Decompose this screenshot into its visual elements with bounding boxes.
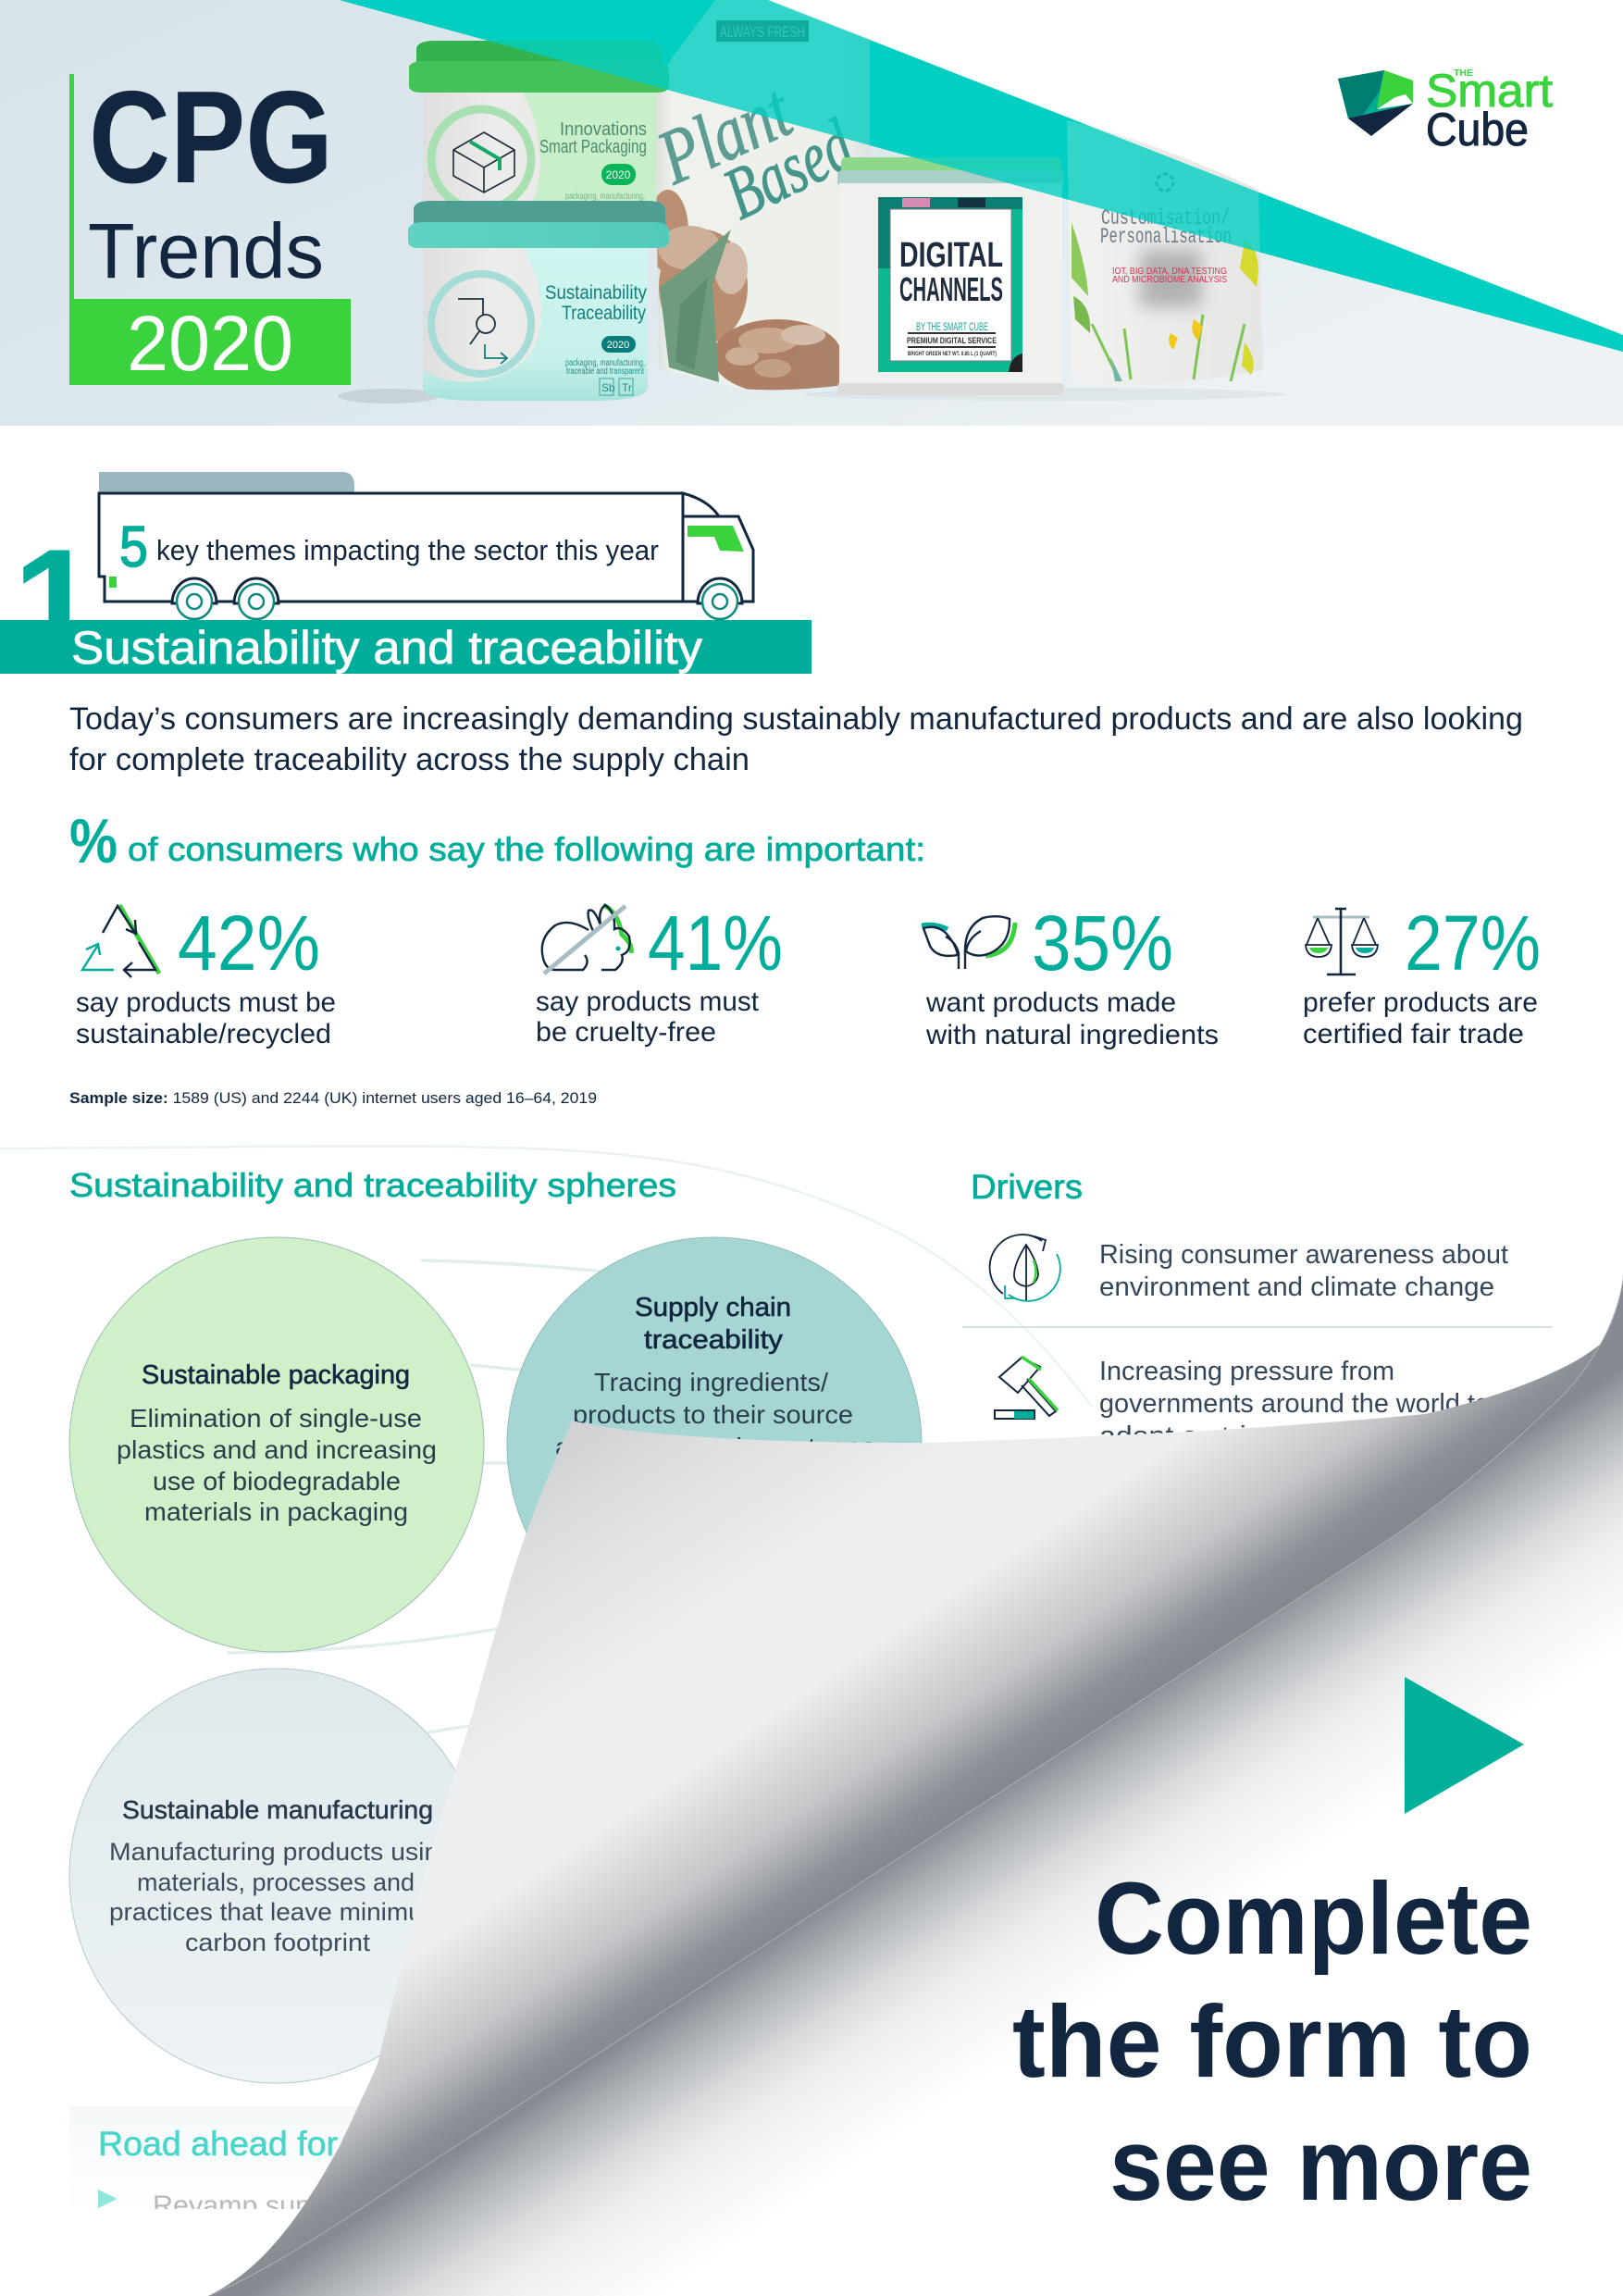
stat: 42%: say products must be [76,987,336,1018]
icon: rabbit crossed out [542,905,631,974]
sphere: supply chain traceability [507,1237,922,1652]
title block: CPG [89,64,333,211]
header background [0,0,1623,426]
product: digital channels tin: BY THE SMART CUBE [916,320,988,333]
driver: government pressure: adopt a stringent policy [1099,1421,1406,1451]
stat: 35%: 35% [1032,900,1173,987]
product: customisation pouch: AND MICROBIOME ANALYSIS [1112,275,1227,285]
stat: 35%: with natural ingredients [925,1020,1219,1050]
product: tub innovations smart packaging [409,41,669,209]
call to action text: Complete [1095,1862,1532,1976]
sphere: supply chain traceability: and across various stages [555,1433,875,1461]
product: tub sustainability traceability: Tr [622,381,632,394]
logo: The Smart Cube: Smart [1426,65,1553,117]
stat: 27%: 27% [1405,900,1541,987]
title block: Trends [88,207,324,294]
call to action text: see more [1109,2108,1532,2222]
product: tub sustainability traceability: packaging, manufacturing, [565,358,645,368]
icon: flower [1157,174,1173,191]
sphere: sustainable packaging: materials in packaging [144,1497,408,1526]
call to action text: the form to [1012,1985,1532,2099]
panel: road ahead: Revamp supply [153,2191,347,2221]
product: tub sustainability traceability: traceable and transparent [566,366,644,377]
icon: gavel [995,1357,1058,1419]
icon: traceability magnifier [458,299,507,364]
truck with heading: 5 [119,515,148,579]
logo: The Smart Cube [1338,65,1553,155]
product: tub innovations smart packaging: packaging, manufacturing, [565,192,645,202]
drivers heading: Drivers [971,1168,1083,1206]
icon: recycle triangle [82,905,159,977]
wheels [172,578,742,619]
product: plant based bag [645,0,870,395]
divider [962,1326,1553,1328]
product: tub sustainability traceability: Sustainability [545,282,647,304]
product: customisation pouch [1067,120,1263,385]
stat: 41% [536,900,783,1048]
sample size note: Sample size: 1589 (US) and 2244 (UK) internet users aged 16–64, 2019 [69,1089,597,1107]
stat: 35%: want products made [925,987,1176,1018]
call to action text [1012,1862,1532,2222]
stat: 42%: sustainable/recycled [76,1019,331,1049]
stat: 42% [76,900,336,1049]
stat: 27%: prefer products are [1303,987,1538,1018]
stats heading: % [69,806,118,876]
arrow: play triangle [1405,1677,1524,1814]
intro paragraph: for complete traceability across the supply chain [69,742,750,777]
driver: government pressure: Increasing pressure from [1099,1357,1394,1386]
product: digital channels tin: BRIGHT GREEN NET WT. 0.85 L (1 QUART) [908,352,997,357]
stat: 42%: 42% [178,900,320,987]
intro paragraph: Today’s consumers are increasingly demanding sustainably manufactured products and are also looking [69,701,1523,737]
icon: parcel box [453,132,514,192]
sphere: sustainable manufacturing [69,1669,484,2083]
product: customisation pouch: Customisation/ [1101,206,1230,230]
product: digital channels tin [837,157,1064,395]
sphere: sustainable manufacturing: materials, processes and [137,1868,415,1896]
panel: road ahead: Road ahead for [98,2125,338,2163]
sphere: supply chain traceability: traceability [644,1325,784,1355]
product: plant based bag: Plant [645,68,805,202]
big theme number 1: 1 [13,517,98,688]
sphere: sustainable packaging: plastics and and increasing [117,1435,437,1464]
icon: sprout leaves [922,916,1015,969]
truck with heading: key themes impacting the sector this year [156,534,659,566]
product: tub sustainability traceability: 2020 [607,340,629,351]
stat: 27% [1303,900,1541,1049]
product: tub innovations smart packaging: Innovations [560,119,647,140]
sphere: sustainable packaging: Sustainable packaging [142,1360,410,1390]
product: tub sustainability traceability [408,201,669,401]
truck with heading [99,472,753,619]
panel: road ahead [69,2106,358,2209]
intro paragraph [69,701,1523,777]
stat: 27%: certified fair trade [1303,1019,1524,1049]
driver: government pressure [995,1357,1490,1451]
bag label: always fresh: ALWAYS FRESH [720,23,805,41]
sphere: sustainable manufacturing: carbon footprint [185,1929,371,1956]
sphere: sustainable manufacturing: Manufacturing products using [109,1838,453,1866]
spheres heading: Sustainability and traceability spheres [69,1166,676,1204]
sphere: supply chain traceability: Supply chain [635,1293,791,1322]
title block: 2020 [127,300,293,387]
stat: 41%: be cruelty-free [536,1017,716,1048]
page curl: folded sheet [208,1273,1623,2296]
sphere: supply chain traceability: Tracing ingredients/ [594,1368,828,1396]
product: customisation pouch: IOT, BIG DATA, DNA TESTING [1112,267,1227,277]
product: digital channels tin: CHANNELS [899,270,1003,308]
page curl: revealed page with shadow [208,1280,1623,2296]
product: customisation pouch: Personalisation [1100,225,1232,249]
stats heading [69,806,925,876]
sphere: sustainable packaging: use of biodegradable [153,1467,401,1496]
driver: rising consumer awareness [990,1235,1508,1302]
product: digital channels tin: DIGITAL [899,236,1003,275]
icon: leaf in cycle arrows [990,1235,1060,1301]
connector swoosh lines [0,1146,1092,1732]
product: tub innovations smart packaging: 2020 [606,168,631,181]
stats heading: of consumers who say the following are important: [128,830,925,868]
sphere: sustainable manufacturing: Sustainable manufacturing [122,1795,433,1824]
product: tub sustainability traceability: Traceability [562,303,646,324]
sphere: sustainable manufacturing: practices that leave minimum [109,1898,444,1926]
bag label: always fresh [716,20,809,42]
icon: balance scale [1306,909,1378,974]
stat: 41%: 41% [648,900,783,987]
driver: rising consumer awareness: Rising consumer awareness about [1099,1240,1508,1270]
section banner: Sustainability and traceability [71,622,702,674]
stat: 35% [922,900,1219,1050]
driver: rising consumer awareness: environment and climate change [1099,1272,1494,1302]
title block [69,64,351,387]
sphere: sustainable packaging [69,1237,484,1652]
teal diagonal overlay [340,0,1623,352]
sphere: supply chain traceability: products to their source [573,1400,853,1429]
product: tub sustainability traceability: Sb [601,381,615,394]
product: digital channels tin: PREMIUM DIGITAL SERVICE [907,336,997,345]
logo: The Smart Cube: Cube [1426,104,1529,155]
stat: 41%: say products must [536,987,760,1017]
driver: government pressure: governments around the world to [1099,1389,1490,1419]
sphere: sustainable packaging: Elimination of single-use [130,1404,422,1433]
page curl: crease highlight [208,1280,1623,2296]
logo: The Smart Cube: THE [1454,68,1473,79]
product: tub innovations smart packaging: Smart Packaging [539,137,647,157]
product: plant based bag: Based [712,105,866,235]
product photo: shadow beneath products [338,388,1286,403]
